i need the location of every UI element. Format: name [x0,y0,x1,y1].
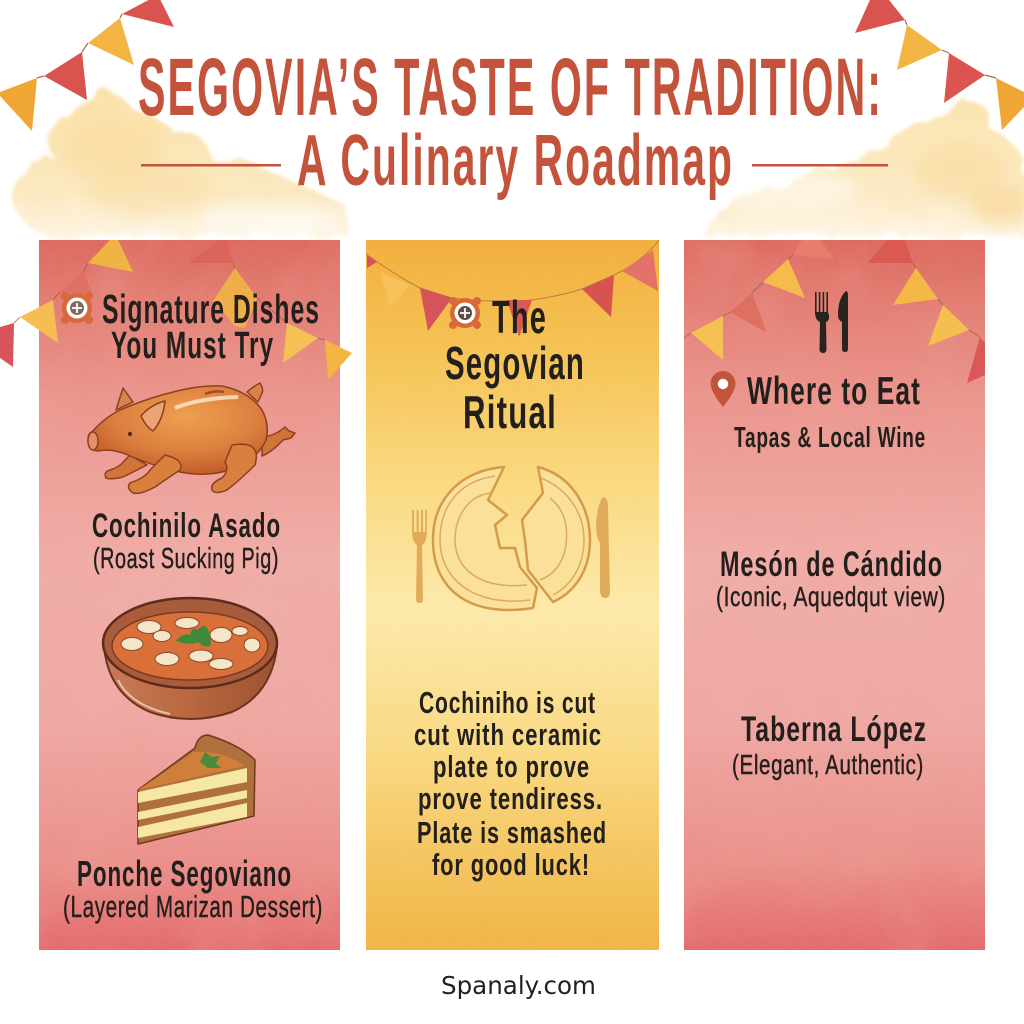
restaurant: taberna lopez: (Elegant, Authentic) [732,749,924,780]
panel: the segovian ritual [366,240,659,950]
icon: smashed plate with fork and knife [412,467,610,610]
text: ritual description: cut with ceramic [414,717,602,752]
text: ritual description: Cochiniho is cut [419,685,596,720]
icon: ornament [449,297,481,329]
panel: signature dishes [0,240,352,950]
icon: bean stew bowl [103,598,277,719]
watercolor cloud: left [12,92,350,238]
text: ritual description: prove tendiress. [418,781,603,816]
dish label: ponche segoviano: Ponche Segoviano [77,853,292,894]
heading: the segovian ritual [445,291,585,438]
heading: the segovian ritual: Ritual [463,386,557,438]
text: ritual description [414,685,607,882]
heading: signature dishes: Signature Dishes [102,286,320,332]
icon: roast pig [88,383,295,493]
dish label: cochinilo asado: (Roast Sucking Pig) [93,543,279,575]
heading: where to eat [734,370,926,454]
text: ritual description: Plate is smashed [417,815,607,850]
heading: the segovian ritual: Segovian [445,337,585,389]
restaurant: taberna lopez [732,710,927,780]
dish label: ponche segoviano: (Layered Marizan Dessert) [63,889,323,924]
bunting: top left [0,0,174,131]
text: ritual description: for good luck! [432,847,590,882]
heading: the segovian ritual: The [492,291,547,343]
icon: fork and knife [815,291,848,353]
dish label: ponche segoviano [63,853,323,924]
dish label: cochinilo asado [92,507,281,575]
panel bunting: right panel [684,240,985,383]
footer: source: Spanaly.com [441,971,596,1000]
icon: ponche cake slice [138,735,255,844]
restaurant: taberna lopez: Taberna López [741,710,927,749]
icon: ornament [61,292,93,324]
text: ritual description: plate to prove [433,749,590,784]
heading: where to eat: Where to Eat [747,370,921,413]
title [138,42,888,201]
heading: signature dishes: You Must Try [111,325,274,367]
dish label: cochinilo asado: Cochinilo Asado [92,507,281,545]
panel bunting: middle panel [366,240,659,337]
panel bunting: left panel [0,240,352,380]
heading: signature dishes [102,286,320,367]
panel: where to eat [684,240,985,950]
heading: where to eat: Tapas & Local Wine [734,422,926,454]
restaurant: meson de candido: (Iconic, Aquedqut view) [716,581,946,612]
icon: location pin [710,371,736,407]
bunting: top right [855,0,1024,130]
watercolor cloud: right [702,100,1024,236]
restaurant: meson de candido [716,545,946,612]
